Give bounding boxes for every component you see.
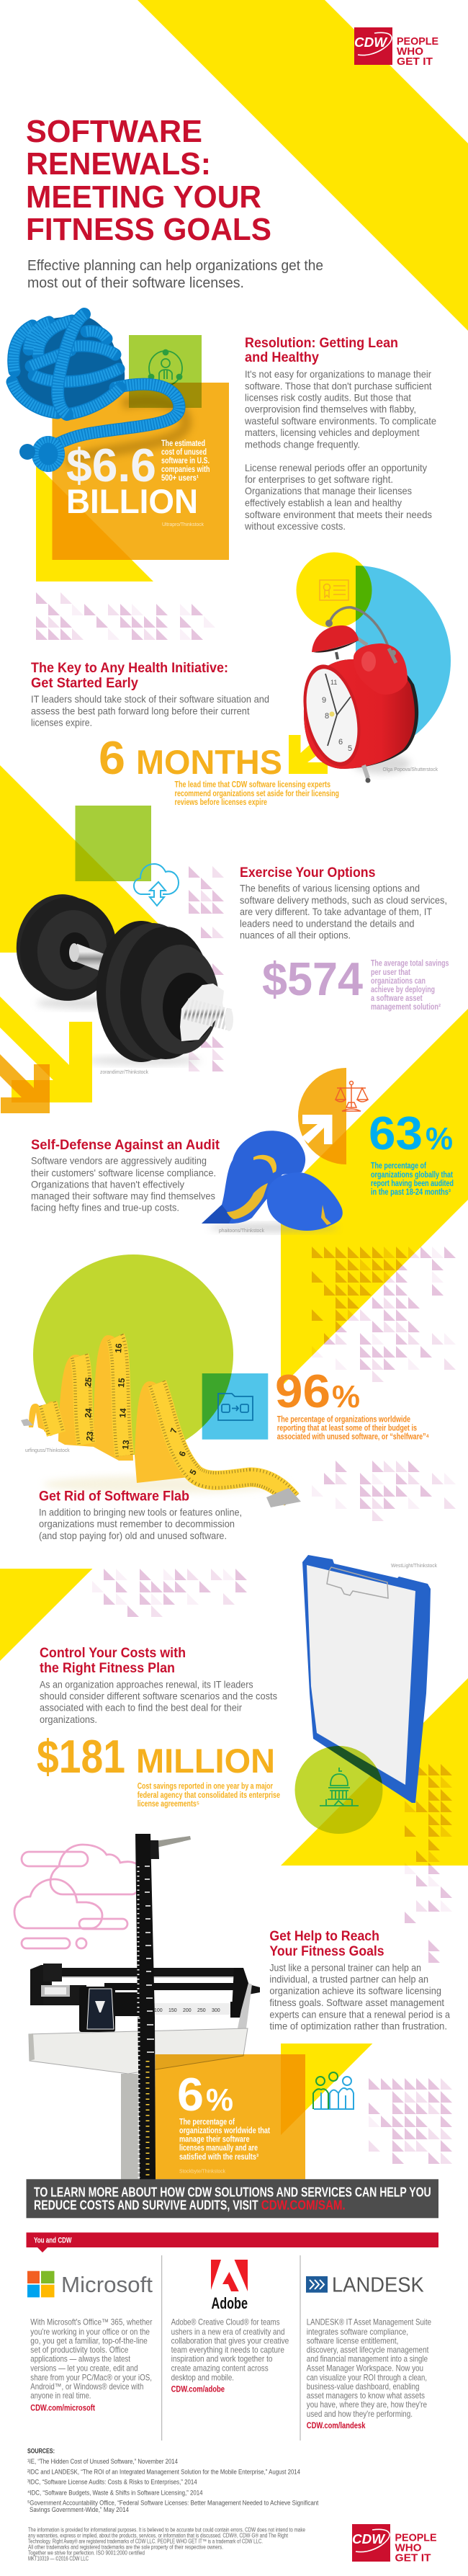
text block: exercise: software delivery methods, such as cloud services, xyxy=(240,894,447,906)
icon: tape measure: 5 xyxy=(187,1467,199,1477)
icon: boxing gloves xyxy=(202,1131,343,1232)
text block: LANDESK xyxy=(307,2317,431,2430)
text block: self-defense xyxy=(31,1155,216,1213)
text block: get help: fitness goals. Software asset management xyxy=(269,1997,444,2008)
text block: resolution: Organizations that manage their licenses xyxy=(245,485,412,496)
sources: ¹IE, “The Hidden Cost of Unused Software,” November 2014 xyxy=(27,2458,178,2466)
text block: Adobe: create amazing content across xyxy=(171,2363,269,2374)
stat: $574: $574 xyxy=(262,953,363,1005)
photo credit: WestLight/Thinkstock xyxy=(391,1564,437,1569)
stat: 6 months: 6 xyxy=(99,731,125,784)
icon: cloud transfer xyxy=(134,864,179,906)
stat: 96%: reporting that at least some of their budget is xyxy=(277,1425,417,1433)
text block: Microsoft: applications — always the latest xyxy=(30,2354,131,2364)
text block: self-defense: Software vendors are aggressively auditing xyxy=(31,1155,207,1167)
arrow: orange down-right xyxy=(0,1054,50,1113)
text block: LANDESK: used and how they're performing. xyxy=(307,2409,413,2419)
large yellow triangle right xyxy=(281,1678,468,1866)
text block: resolution: License renewal periods offer an opportunity xyxy=(245,462,427,473)
yellow diagonal band xyxy=(138,0,468,331)
stat: $181 million: MILLION xyxy=(136,1742,275,1780)
icon: team xyxy=(313,2072,354,2109)
stat: 6 months: The lead time that CDW software licensing experts xyxy=(174,781,330,790)
stat: 96%: % xyxy=(332,1379,360,1414)
text block: Microsoft: versions — let you create, edit and xyxy=(30,2363,138,2374)
arrow: white up-right xyxy=(302,1115,333,1144)
icon: certificate xyxy=(320,580,348,600)
photo credit: phaitoons/Thinkstock xyxy=(219,1229,264,1234)
text block: resolution: effectively establish a lean and healthy xyxy=(245,497,402,509)
subtitle xyxy=(27,258,323,291)
triangle pattern xyxy=(312,1247,456,1382)
you and cdw bar xyxy=(26,2232,438,2252)
call to action banner xyxy=(26,2179,438,2218)
disclaimer xyxy=(28,2526,305,2562)
text block: exercise: leaders need to understand the details and xyxy=(240,917,415,929)
stat: 6%: The percentage of xyxy=(179,2118,235,2126)
text block: LANDESK: asset managers to know what assets xyxy=(307,2390,425,2400)
link: CDW.com/landesk xyxy=(307,2420,366,2430)
CDW logo top xyxy=(354,27,438,68)
text block: self-defense: facing hefty fines and true-up costs. xyxy=(31,1202,179,1213)
rope shadow xyxy=(66,401,186,461)
text block: self-defense: their customers' software license compliance. xyxy=(31,1167,216,1178)
logo: Microsoft: Microsoft xyxy=(61,2272,153,2297)
logo: Microsoft xyxy=(27,2271,153,2297)
icon: clipboard xyxy=(302,1555,431,1803)
CDW logo top: PEOPLE xyxy=(397,35,438,48)
text block: resolution: It's not easy for organizations to manage their xyxy=(245,368,431,380)
text block: Microsoft: you're working in your office or on the xyxy=(30,2327,150,2337)
disclaimer: Together we strive for perfection. ISO 9001:2000 certified xyxy=(28,2550,145,2557)
orange half circle xyxy=(298,1068,346,1164)
heading: get help: Get Help to Reach xyxy=(269,1928,379,1944)
text block: exercise: The benefits of various licensing options and xyxy=(240,883,420,894)
stat: $574: organizations can xyxy=(371,977,426,986)
stat: $6.6 billion xyxy=(66,439,210,520)
green square xyxy=(75,806,151,881)
orange square xyxy=(52,383,229,560)
stat: 6 months xyxy=(99,731,339,807)
text block: flab: organizations must remember to decommission xyxy=(39,1518,235,1530)
text block: get help: experts can ensure that a renewal period is a xyxy=(269,2008,450,2020)
heading: get help xyxy=(269,1928,384,1959)
stat: $6.6 billion: BILLION xyxy=(66,482,198,520)
icon: tape measure: 15 xyxy=(116,1377,127,1388)
icon: person in orbit xyxy=(148,350,182,385)
triangle pattern xyxy=(36,592,215,640)
photo credit: Ultrapro/Thinkstock xyxy=(162,522,204,527)
text block: LANDESK: integrates software compliance, xyxy=(307,2327,408,2337)
text block: resolution: software. Those that don't purchase sufficient xyxy=(245,380,432,391)
link: CDW.com/adobe xyxy=(171,2384,225,2394)
heading: get help: Your Fitness Goals xyxy=(269,1943,384,1959)
stat: 6 months: recommend organizations set aside for their licensing xyxy=(174,790,339,798)
heading: exercise your options: Exercise Your Options xyxy=(240,865,376,881)
call to action banner: REDUCE COSTS AND SURVIVE AUDITS, VISIT xyxy=(34,2198,258,2213)
text block: key xyxy=(31,693,269,728)
stat: $574: management solution² xyxy=(371,1003,441,1012)
triangle pattern xyxy=(189,866,224,1071)
stat: $6.6 billion: The estimated xyxy=(161,440,205,448)
stat: 96%: 96 xyxy=(275,1365,330,1417)
text block: LANDESK: can visualize your ROI through a clean, xyxy=(307,2372,427,2382)
text block: Microsoft: With Microsoft's Office™ 365, whether xyxy=(30,2317,152,2327)
stat: 6%: 6 xyxy=(177,2068,204,2121)
photo credit: urfinguss/Thinkstock xyxy=(25,1448,70,1453)
icon: clouds xyxy=(14,1845,138,1948)
text block: resolution: without excessive costs. xyxy=(244,520,346,532)
text block: LANDESK: Asset Manager Workspace. Now you xyxy=(307,2363,423,2374)
icon: doctor's scale: 300 xyxy=(212,2008,220,2013)
column dividers xyxy=(162,2255,300,2441)
photo credit: Olga Popova/Shutterstock xyxy=(383,767,438,772)
stat: $181 million: license agreements⁵ xyxy=(138,1800,199,1809)
stat: 6%: licenses manually and are xyxy=(179,2144,258,2153)
yellow triangle xyxy=(281,2044,372,2135)
text block: resolution: overprovision find themselves with flabby, xyxy=(245,404,416,415)
text block: Microsoft: go, you get a familiar, top-of-the-line xyxy=(30,2335,148,2345)
icon: tape measure: 13 xyxy=(120,1439,131,1450)
text block: Adobe: inspiration and work together to xyxy=(171,2354,273,2364)
icon: doctor's scale: 200 xyxy=(183,2008,192,2013)
subtitle: Effective planning can help organizations get the xyxy=(27,258,323,274)
icon: alarm clock xyxy=(294,607,418,783)
text block: get help: organization achieve its software licensing xyxy=(269,1985,441,1997)
icon: doctor's scale: 250 xyxy=(197,2008,206,2013)
stat: 63% xyxy=(369,1107,454,1197)
text block: get help xyxy=(269,1961,450,2032)
stat: 63%: 63 xyxy=(369,1107,423,1159)
heading: self-defense: Self-Defense Against an Audit xyxy=(31,1137,220,1153)
sources: ³IDC, “Software License Audits: Costs & Risks to Enterprises,” 2014 xyxy=(27,2479,197,2487)
text block: resolution: software environment that meets their needs xyxy=(245,509,432,520)
stat: 96%: The percentage of organizations worldwide xyxy=(277,1415,410,1424)
text block: exercise: nuances of all their options. xyxy=(240,930,351,941)
icon: alarm clock: 8 xyxy=(325,712,329,721)
stat: 96%: associated with unused software, or “shelfware”⁴ xyxy=(277,1433,429,1442)
heading: resolution xyxy=(245,335,398,365)
text block: control xyxy=(40,1678,277,1725)
icon: capitol xyxy=(320,1768,359,1806)
heading: key to any health initiative xyxy=(31,660,228,691)
text block: LANDESK: business-value dashboard, enabling xyxy=(307,2381,419,2392)
green circle xyxy=(295,1746,383,1834)
stat: 6 months: MONTHS xyxy=(136,743,282,781)
heading: get rid of software flab: Get Rid of Software Flab xyxy=(39,1489,189,1505)
sources: ²IDC and LANDESK, “The ROI of an Integrated Management Solution for the Mobile Enterprise,” August 2014 xyxy=(27,2469,300,2477)
text block: Microsoft xyxy=(30,2317,152,2413)
text block: Microsoft: anyone in real time. xyxy=(30,2390,91,2400)
CDW logo top: CDW xyxy=(354,35,388,50)
text block: LANDESK: software license entitlement, xyxy=(307,2335,399,2345)
triangle pattern xyxy=(405,1764,452,1963)
text block: flab: (and stop paying for) old and unused software. xyxy=(39,1530,227,1541)
text block: flab xyxy=(39,1506,242,1541)
sources: Savings Government-Wide,” May 2014 xyxy=(30,2506,129,2514)
text block: control: should consider different software scenarios and the costs xyxy=(40,1690,277,1702)
green square xyxy=(129,335,202,408)
text block: Adobe: ushers in a new era of creativity and xyxy=(171,2327,285,2337)
text block: get help: Just like a personal trainer can help an xyxy=(269,1961,421,1973)
title: SOFTWARE xyxy=(26,114,202,149)
photo credit: zorandimzr/Thinkstock xyxy=(100,1070,148,1075)
yellow triangle xyxy=(0,1569,92,1661)
yellow triangle xyxy=(36,464,153,581)
disclaimer: any warranties, express or implied, about the products, services, or information that is discussed. CDW®, CDW·G® and The Right xyxy=(28,2533,289,2539)
text block: exercise: are very different. To take advantage of them, IT xyxy=(240,906,432,917)
CDW logo bottom: GET IT xyxy=(395,2552,431,2564)
stat: $574 xyxy=(262,953,449,1012)
title xyxy=(26,114,271,247)
text block: control: organizations. xyxy=(40,1713,97,1725)
text block: resolution: wasteful software environments. To complicate xyxy=(244,415,436,427)
stat: $6.6 billion: 500+ users¹ xyxy=(161,474,199,483)
stat: 6%: manage their software xyxy=(179,2136,250,2144)
CDW logo top: GET IT xyxy=(397,55,433,68)
icon: tape measure: 14 xyxy=(117,1407,128,1418)
text block: Adobe xyxy=(171,2317,289,2394)
icon: doctor's scale xyxy=(29,1834,260,2180)
stat: 63%: in the past 18-24 months³ xyxy=(371,1188,451,1197)
stat: 6%: % xyxy=(206,2082,233,2118)
stat: $181 million: Cost savings reported in one year by a major xyxy=(138,1783,273,1791)
yellow triangle left xyxy=(0,765,187,953)
text block: key: assess the best path forward long before their current xyxy=(31,705,250,716)
arrow: yellow down-right xyxy=(0,997,92,1102)
sources: ⁵Government Accountability Office, “Federal Software Licenses: Better Management Needed to Achieve Significant xyxy=(27,2500,319,2508)
text block: Microsoft: Android™, or Windows® device with xyxy=(30,2381,143,2392)
heading: control your costs: the Right Fitness Plan xyxy=(40,1660,175,1676)
stat: 6%: organizations worldwide that xyxy=(179,2126,270,2135)
logo: Adobe xyxy=(211,2260,248,2312)
yellow and blue circles xyxy=(297,552,451,756)
icon: tape measure: 25 xyxy=(83,1376,94,1387)
large yellow diagonal xyxy=(281,1009,468,1387)
text block: get help: time of optimization rather than frustration. xyxy=(269,2020,447,2032)
title: MEETING YOUR xyxy=(26,179,261,215)
text block: resolution: methods change frequently. xyxy=(245,438,360,450)
call to action banner: CDW.COM/SAM. xyxy=(261,2198,346,2213)
stat: $574: per user that xyxy=(371,968,410,977)
stat: $574: achieve by deploying xyxy=(371,986,435,994)
green circle xyxy=(33,1254,233,1455)
stat: 96% xyxy=(275,1365,429,1442)
you and cdw bar: You and CDW xyxy=(34,2237,72,2245)
text block: control: As an organization approaches renewal, its IT leaders xyxy=(40,1678,253,1690)
stat: $181 million: $181 xyxy=(37,1730,125,1783)
text block: Microsoft: share from your PC/Mac® or your iOS, xyxy=(30,2372,152,2382)
stat: $574: a software asset xyxy=(371,994,423,1003)
stat: 63%: % xyxy=(426,1121,453,1156)
icon: alarm clock: 9 xyxy=(322,696,326,705)
text block: get help: individual, a trusted partner can help an xyxy=(269,1974,428,1985)
panel: $6.6 billion xyxy=(12,314,229,581)
text block: LANDESK: you have, where they are, how they're xyxy=(307,2399,427,2410)
heading: key to any health initiative: The Key to Any Health Initiative: xyxy=(31,660,228,676)
text block: resolution: licenses risk costly audits. But those that xyxy=(245,391,411,403)
disclaimer: Technology. Right Away® are registered trademarks of CDW LLC. PEOPLE WHO GET IT™ is a trademark of CDW LLC. xyxy=(28,2539,263,2545)
CDW logo bottom: CDW xyxy=(352,2532,386,2546)
icon: scales of justice xyxy=(336,1081,368,1111)
text block: key: licenses expire. xyxy=(31,716,92,728)
text block: resolution: matters, licensing vehicles and deployment xyxy=(245,427,420,438)
icon: doctor's scale: 150 xyxy=(168,2008,177,2013)
disclaimer: The information is provided for informational purposes. It is believed to be accurate but could contain errors. CDW does not intend to make xyxy=(28,2526,305,2533)
text block: exercise xyxy=(240,883,447,941)
link: CDW.com/microsoft xyxy=(30,2403,95,2413)
CDW logo bottom: PEOPLE xyxy=(395,2532,436,2544)
title: FITNESS GOALS xyxy=(26,212,271,247)
text block: Microsoft: set of productivity tools. Office xyxy=(30,2345,129,2355)
logo: Adobe: Adobe xyxy=(212,2294,248,2312)
icon: tape measure: 6 xyxy=(177,1450,188,1458)
stat: $181 million xyxy=(37,1730,280,1809)
text block: LANDESK: discovery, asset lifecycle management xyxy=(307,2345,429,2355)
icon: dumbbell xyxy=(10,888,233,1065)
triangle pattern xyxy=(312,1461,456,1521)
sources: ⁴IDC, “Software Budgets, Waste & Shifts in Software Licensing,” 2014 xyxy=(27,2489,203,2497)
disclaimer: All other trademarks and registered trademarks are the sole property of their respective owners. xyxy=(28,2544,223,2551)
sources xyxy=(27,2447,319,2514)
icon: alarm clock: 5 xyxy=(348,744,352,753)
text block: resolution: for enterprises to get software right. xyxy=(245,473,393,485)
icon: tape measure: 7 xyxy=(168,1427,179,1435)
triangle pattern xyxy=(92,1569,247,1617)
text block: resolution xyxy=(244,368,436,532)
text block: self-defense: Organizations that haven't effectively xyxy=(31,1178,184,1190)
icon: yellow arrow down-left xyxy=(289,735,333,774)
stat: $6.6 billion: companies with xyxy=(161,465,210,474)
text block: key: IT leaders should take stock of their software situation and xyxy=(31,693,269,705)
CDW logo bottom xyxy=(352,2524,436,2564)
text block: Adobe: desktop and mobile. xyxy=(171,2372,234,2382)
icon: folder transfer xyxy=(218,1394,253,1420)
heading: control your costs xyxy=(40,1645,186,1676)
text block: flab: In addition to bringing new tools or features online, xyxy=(39,1506,242,1517)
text block: control: associated with each to find the best deal for their xyxy=(40,1702,242,1713)
text block: Adobe: team everything it needs to capture xyxy=(171,2345,284,2355)
heading: resolution: Resolution: Getting Lean xyxy=(245,335,398,351)
stat: $6.6 billion: software in U.S. xyxy=(161,457,210,465)
photo credit: Stockbyte/Thinkstock xyxy=(179,2170,225,2175)
heading: key to any health initiative: Get Started Early xyxy=(31,675,138,691)
heading: resolution: and Healthy xyxy=(245,349,319,365)
sources: SOURCES: xyxy=(27,2447,55,2455)
orange square xyxy=(156,2054,305,2179)
text block: self-defense: managed their software may find themselves xyxy=(31,1190,215,1201)
stat: $6.6 billion: $6.6 xyxy=(66,439,156,491)
stat: 63%: The percentage of xyxy=(371,1162,426,1171)
stat: $181 million: federal agency that consolidated its enterprise xyxy=(138,1791,280,1800)
CDW logo bottom: WHO xyxy=(395,2542,422,2554)
subtitle: most out of their software licenses. xyxy=(27,275,244,291)
icon: doctor's scale: 100 xyxy=(154,2008,163,2013)
disclaimer: MKT10319 — ©2016 CDW LLC xyxy=(28,2556,89,2562)
CDW logo top: WHO xyxy=(397,45,423,58)
text block: Adobe: Adobe® Creative Cloud® for teams xyxy=(171,2317,279,2327)
heading: control your costs: Control Your Costs with xyxy=(40,1645,186,1661)
triangle pattern xyxy=(369,2078,452,2164)
icon: tape measure: 16 xyxy=(113,1342,124,1353)
text block: LANDESK: and financial management into a single xyxy=(307,2354,428,2364)
text block: Adobe: collaboration that gives your creative xyxy=(171,2335,289,2345)
icon: tape measure: 24 xyxy=(83,1407,94,1418)
stat: 6 months: reviews before licenses expire xyxy=(174,798,267,807)
icon: alarm clock: 6 xyxy=(338,738,343,746)
blue square xyxy=(202,1373,268,1440)
icon: tape measure xyxy=(21,1335,301,1507)
stat: $6.6 billion: cost of unused xyxy=(161,448,207,457)
stat: 6%: satisfied with the results³ xyxy=(179,2153,258,2162)
icon: blue rope xyxy=(12,314,179,472)
logo: LANDESK: LANDESK xyxy=(332,2274,424,2297)
icon: alarm clock: 11 xyxy=(330,679,337,686)
text block: LANDESK: LANDESK® IT Asset Management Suite xyxy=(307,2317,431,2327)
icon: tape measure: 23 xyxy=(84,1430,95,1441)
stat: 6% xyxy=(177,2068,270,2162)
title: RENEWALS: xyxy=(26,146,211,182)
